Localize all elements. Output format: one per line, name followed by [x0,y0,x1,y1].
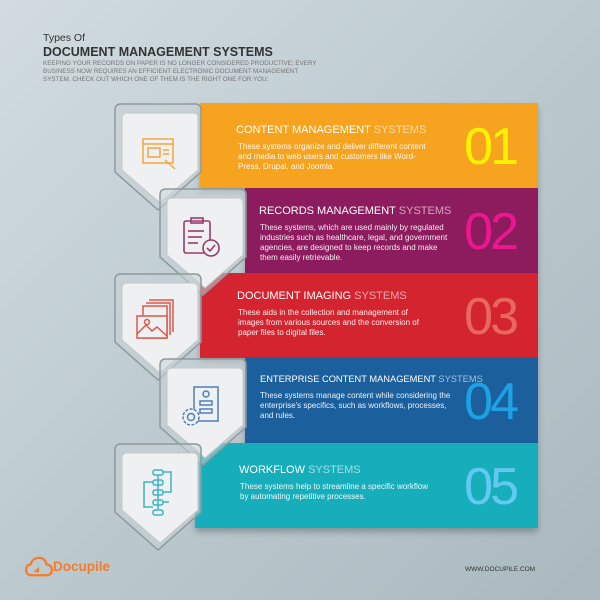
panel: 03 document imaging [200,273,538,358]
text 02: These systems, which are used mainly by regulated industries such as healthcare, legal, and government agencies, are designed to keep records and make them easily retrievable. [260,223,447,262]
subtitle: Types Of: Types Of [43,32,85,44]
number 03: 03 [464,288,516,346]
heading 04: ENTERPRISE CONTENT MANAGEMENT SYSTEMS [260,374,483,384]
icon shield 5 [114,443,202,551]
heading 03: DOCUMENT IMAGING SYSTEMS [237,290,407,302]
icon shield 2 [159,188,247,296]
text 04: These systems manage content while considering the enterprise's specifics, such as workflows, processes, and rules. [260,391,450,420]
heading 01: CONTENT MANAGEMENT SYSTEMS [236,124,426,136]
number 02: 02 [464,203,516,261]
text 03: These aids in the collection and management of images from various sources and the conversion of paper files to digital files. [238,308,419,337]
website url: WWW.DOCUPILE.COM [465,566,535,573]
text 01: These systems organize and deliver different content and media to web users and customers like Word-Press, Drupal, and Joomla. [238,142,426,171]
heading 05: WORKFLOW SYSTEMS [239,464,361,476]
icon: cloud [25,556,53,576]
number 05: 05 [464,458,516,516]
icon shield 3 [114,273,202,381]
panel: 01 content management [200,103,538,188]
title: DOCUMENT MANAGEMENT SYSTEMS [43,45,273,59]
panel: 02 records management [245,188,538,273]
header [43,32,317,83]
heading 02: RECORDS MANAGEMENT SYSTEMS [259,205,451,217]
number 04: 04 [464,373,516,431]
logo: Docupile [25,556,110,576]
text 05: These systems help to streamline a specific workflow by automating repetitive processes. [240,482,428,501]
intro text: KEEPING YOUR RECORDS ON PAPER IS NO LONGER CONSIDERED PRODUCTIVE; EVERY BUSINESS NOW REQUIRES AN EFFICIENT ELECTRONIC DOCUMENT MANAGEMENT SYSTEM. CHECK OUT WHICH ONE OF THEM IS THE RIGHT ONE FOR YOU: [43,60,317,83]
number 01: 01 [464,118,516,176]
panel: 04 enterprise content management [245,358,538,443]
icon shield 1 [114,103,202,211]
icon shield 4 [159,358,247,466]
panel: 05 workflow [195,443,538,528]
logo text: Docupile [53,559,110,574]
